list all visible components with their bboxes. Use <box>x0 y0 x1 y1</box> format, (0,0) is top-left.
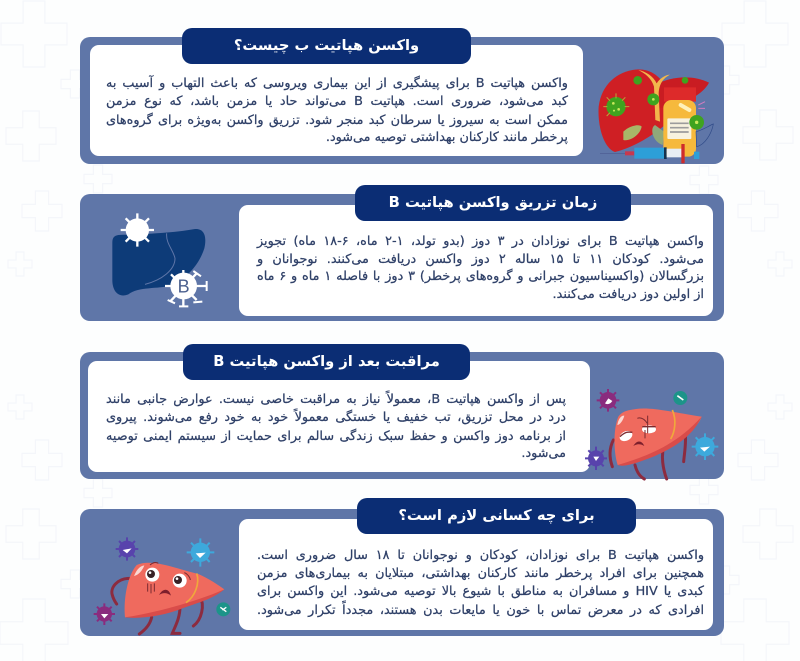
text card 3 <box>88 361 590 472</box>
body text 3: می‌شود. <box>521 446 566 461</box>
body text 4: همچنین برای افراد پرخطر مانند کارکنان بهداشتی، مبتلایان به بیماری‌های مزمن <box>257 566 704 581</box>
body text 2 <box>256 234 704 302</box>
body text 1: واکسن هپاتیت B برای پیشگیری از این بیماری ویروسی که باعث التهاب و آسیب به <box>106 76 568 91</box>
body text 1 <box>106 74 568 145</box>
text card 1 <box>90 45 583 156</box>
body text 4 <box>257 548 704 618</box>
icon: sad liver with viruses <box>585 389 718 481</box>
heading 4 <box>357 498 636 534</box>
body text 4: واکسن هپاتیت B برای نوزادان، کودکان و نوجوانان تا ۱۸ سال ضروری است. <box>257 548 704 563</box>
body text 3: از برنامه دوز واکسن و حفظ سبک زندگی سالم برای حمایت از سیستم ایمنی توصیه <box>106 429 566 444</box>
icon: worried liver with viruses <box>94 537 230 636</box>
heading 1 <box>182 28 471 64</box>
body text 4: کبدی یا HIV و مسافران به مناطق با شیوع بالا توصیه می‌شود. این واکسن برای <box>257 584 704 599</box>
icon: navy liver with B virus: B <box>178 276 190 296</box>
panel: who needs the vaccine <box>80 498 724 636</box>
panel: care after the vaccine <box>80 344 724 481</box>
body text 2: از اولین دوز دریافت می‌کنند. <box>553 287 704 302</box>
text card 4 <box>239 519 713 630</box>
heading 2 <box>355 185 631 221</box>
heading 1: واکسن هپاتیت ب چیست؟ <box>234 37 419 54</box>
body text 3: درد در محل تزریق، تب خفیف یا خستگی معمولاً خود به خود رفع می‌شوند. پیروی <box>106 410 566 425</box>
heading 4: برای چه کسانی لازم است؟ <box>398 507 595 524</box>
panel: what is the hepatitis B vaccine <box>80 28 724 164</box>
body text 1: پرخطر مانند کارکنان بهداشتی توصیه می‌شود. <box>326 130 568 145</box>
body text 3 <box>106 390 566 461</box>
heading 2: زمان تزریق واکسن هپاتیت B <box>389 194 597 211</box>
text card 2 <box>239 205 713 316</box>
body text 2: می‌شود. کودکان ۱۱ تا ۱۵ ساله ۲ دوز واکسن دریافت می‌کنند. نوجوانان و <box>257 252 704 267</box>
body text 2: بزرگسالان (واکسیناسیون جبرانی و گروه‌های پرخطر) ۳ دوز با فاصله ۱ ماه و ۶ ماه <box>257 269 704 284</box>
heading 3 <box>183 344 470 380</box>
body text 4: افرادی که در معرض تماس با خون یا مایعات بدن هستند، مجدداً تکرار می‌شود. <box>257 603 704 618</box>
body text 1: کبد می‌شود، ضروری است. هپاتیت B می‌تواند حاد یا مزمن باشد، که نوع مزمن <box>106 94 568 109</box>
panel: when to inject the vaccine <box>80 185 724 321</box>
heading 3: مراقبت بعد از واکسن هپاتیت B <box>213 353 440 370</box>
icon: red liver with viruses and vaccine bottle <box>598 69 714 164</box>
icon: navy liver with B virus <box>112 213 208 308</box>
body text 2: واکسن هپاتیت B برای نوزادان در ۳ دوز (بدو تولد، ۱-۲ ماه، ۶-۱۸ ماه) تجویز <box>257 234 704 249</box>
body text 3: پس از واکسن هپاتیت B، معمولاً نیاز به مراقبت خاصی نیست. عوارض جانبی مانند <box>106 392 566 407</box>
body text 1: ممکن است به سیروز یا سرطان کبد منجر شود. تزریق واکسن به‌ویژه برای گروه‌های <box>106 113 568 128</box>
